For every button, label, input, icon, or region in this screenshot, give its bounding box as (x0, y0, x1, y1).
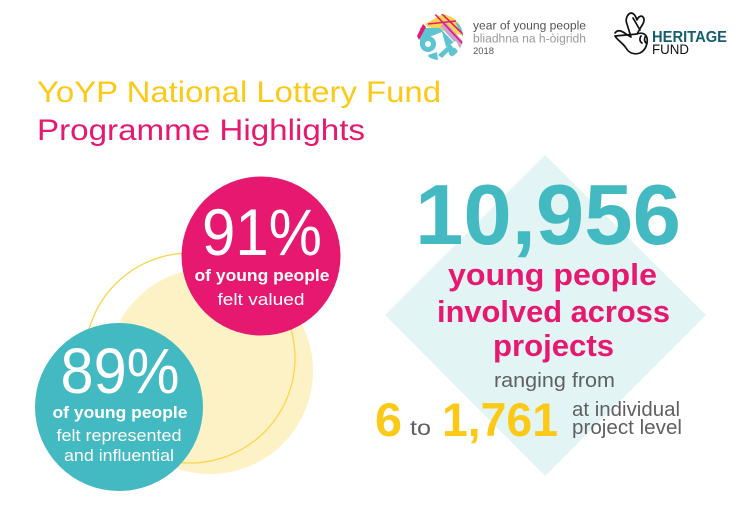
young people involved text (437, 257, 670, 363)
background diamond (385, 155, 706, 476)
panel: 91% circle (182, 176, 340, 336)
individual project level note (572, 399, 682, 439)
panel: 91% circle: felt valued (218, 290, 304, 309)
icon: patterned round logo (417, 14, 463, 60)
pale yellow circle (107, 268, 313, 474)
individual project level note: at individual (572, 399, 680, 421)
young people involved text: involved across (437, 294, 670, 329)
panel: 91% circle: 91% (202, 195, 322, 269)
range figures: 1,761 (442, 393, 558, 446)
panel: 89% circle (35, 323, 203, 491)
range figures (375, 393, 558, 446)
icon: crossed fingers hand (615, 13, 647, 54)
ranging from text: ranging from (494, 370, 615, 392)
logo: heritage fund (615, 13, 727, 57)
logo text (473, 20, 586, 57)
individual project level note: project level (572, 417, 682, 439)
title: Programme Highlights (37, 114, 365, 147)
logo text: bliadhna na h-òigridh (473, 34, 586, 46)
panel: 91% circle: of young people (194, 266, 330, 285)
young people involved text: young people (448, 257, 657, 292)
logo text: year of young people (473, 20, 586, 32)
logo: year of young people (417, 14, 586, 60)
panel: 89% circle: and influential (64, 446, 174, 465)
panel: 89% circle: of young people (52, 403, 188, 422)
title: YoYP National Lottery Fund (37, 76, 441, 109)
heritage fund wordmark (652, 29, 727, 57)
logo text: 2018 (473, 46, 494, 57)
yellow outline circle (85, 253, 295, 463)
heritage fund wordmark: FUND (652, 41, 689, 57)
headline figure: 10,956 (415, 168, 681, 263)
range figures: to (410, 417, 431, 440)
heritage fund wordmark: HERITAGE (652, 29, 727, 46)
range figures: 6 (375, 393, 402, 446)
title (37, 76, 441, 147)
panel: 89% circle: 89% (60, 335, 180, 407)
young people involved text: projects (493, 328, 614, 363)
panel: 89% circle: felt represented (56, 426, 182, 445)
